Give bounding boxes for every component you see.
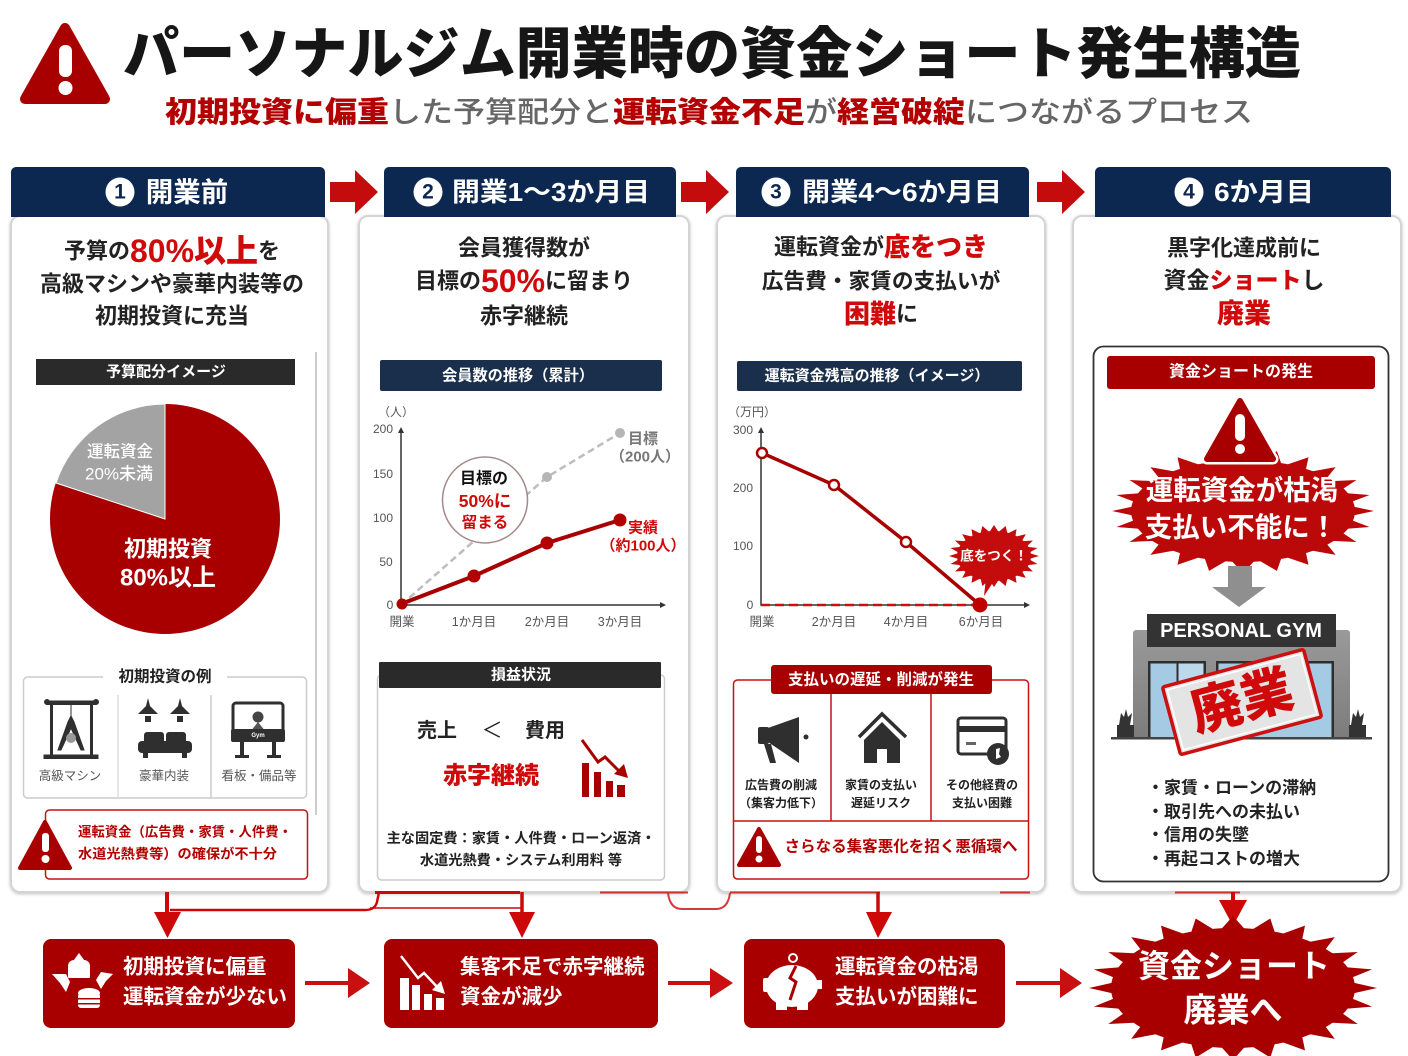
panel 3: months 4 to 6 — [717, 167, 1045, 892]
outcome box 2 — [384, 939, 658, 1028]
payment delay box: 支払い困難 — [952, 795, 1012, 810]
stamp: closed — [1162, 649, 1322, 755]
payment delay box — [733, 665, 1029, 879]
panel 1: before opening — [11, 167, 328, 892]
icon: house — [859, 714, 906, 763]
burst: capital depleted — [1112, 449, 1374, 573]
sub-heading: working capital trend — [737, 361, 1022, 391]
stamp: closed: 廃業 — [1184, 661, 1300, 743]
callout: 50% of target — [442, 457, 528, 543]
profit and loss panel: 損益状況 — [491, 666, 551, 684]
initial investment examples: 高級マシン — [39, 768, 101, 783]
initial investment examples: 初期投資の例 — [118, 666, 212, 686]
panel 2: months 1 to 3 — [359, 167, 689, 892]
payment delay box: （集客力低下） — [739, 795, 823, 810]
line chart: members: 50 — [379, 555, 393, 569]
initial investment examples — [24, 666, 306, 798]
icon: falling bar chart — [582, 740, 628, 797]
fund shortage box: 資金ショートの発生 — [1169, 362, 1313, 380]
pie chart: budget allocation: 運転資金 — [87, 442, 154, 461]
line chart: members: 200 — [373, 422, 393, 436]
profit and loss panel: 売上 — [417, 719, 457, 742]
sub-heading: member count trend: 会員数の推移（累計） — [442, 366, 594, 384]
icon: warning triangle — [1207, 401, 1273, 459]
icon: interior lamps and sofa — [138, 698, 192, 758]
line chart: working capital: 100 — [733, 539, 753, 553]
profit and loss panel: 水道光熱費・システム利用料 等 — [420, 852, 622, 869]
panel 2 summary text: 赤字継続 — [480, 304, 568, 328]
outcome box 3: 運転資金の枯渇 — [835, 956, 978, 978]
initial investment examples: 看板・備品等 — [221, 768, 297, 783]
initial investment examples: 豪華内装 — [139, 768, 189, 783]
panel 1 summary text: 高級マシンや豪華内装等の — [40, 272, 304, 296]
profit and loss panel: ＜ — [482, 720, 502, 742]
arrowheads: connectors — [154, 900, 1247, 938]
icon: title warning triangle — [25, 28, 105, 99]
header: step 4 — [1095, 167, 1391, 217]
panel 4: month 6 — [1073, 167, 1401, 892]
callout: bottoming out burst: 底をつく！ — [960, 548, 1028, 564]
header: step 2: 開業1〜3か月目 — [452, 177, 650, 207]
panel 1 summary text — [40, 233, 304, 328]
panel 1 summary text: 初期投資に充当 — [95, 304, 249, 328]
header: step 4: 6か月目 — [1214, 177, 1314, 207]
payment delay box: さらなる集客悪化を招く悪循環へ — [784, 838, 1018, 856]
line chart: working capital: 4か月目 — [884, 615, 928, 629]
arrow: step 1 to 2 — [330, 170, 378, 214]
payment delay box: その他経費の — [946, 777, 1018, 792]
arrow: step 3 to 4 — [1037, 170, 1085, 214]
header: step 1 — [11, 167, 325, 217]
line chart: members: 150 — [373, 467, 393, 481]
sub-heading: budget allocation — [36, 359, 295, 385]
icon: winged coins — [52, 953, 113, 1008]
consequences list: ・取引先への未払い — [1147, 802, 1300, 822]
icon: broken piggy bank — [763, 954, 822, 1010]
line chart: members: （約100人） — [600, 538, 686, 554]
icon: megaphone — [758, 717, 808, 763]
icon: plants — [1117, 709, 1366, 737]
outcome box 1 — [43, 939, 295, 1028]
line chart: members: 目標 — [628, 430, 658, 448]
callout: 50% of target: 留まる — [462, 514, 508, 532]
callout: 50% of target: 目標の — [460, 468, 508, 488]
header: step 3 — [736, 167, 1029, 217]
fund shortage box — [1094, 346, 1388, 882]
line chart: members: 100 — [373, 511, 393, 525]
panel 3 summary text — [762, 232, 1001, 329]
panel 4 summary text — [1164, 236, 1324, 329]
profit and loss panel: 赤字継続 — [443, 762, 539, 790]
icon: signboard — [231, 703, 285, 758]
illustration: closed personal gym: PERSONAL GYM — [1160, 620, 1322, 642]
profit and loss panel: 費用 — [525, 719, 565, 742]
line chart: members: 1か月目 — [452, 615, 496, 629]
line chart: members — [373, 405, 686, 629]
burst: capital depleted: 運転資金が枯渇 — [1146, 474, 1338, 506]
arrow: grey down — [1212, 566, 1266, 607]
panel 3 summary text: 困難に — [844, 299, 918, 329]
header: step 1: 1 — [114, 180, 126, 204]
illustration: closed personal gym — [1111, 614, 1372, 755]
line chart: working capital: 2か月目 — [812, 615, 856, 629]
panel 1 summary text: 予算の80%以上を — [64, 233, 280, 269]
header: step 3: 開業4〜6か月目 — [802, 177, 1002, 207]
outcome burst: shortage and closure: 廃業へ — [1184, 992, 1282, 1028]
icon: card with coin — [958, 718, 1009, 765]
pie chart: budget allocation: 80%以上 — [120, 564, 216, 592]
payment delay box: 遅延リスク — [851, 795, 911, 810]
arrow: outcome 2 to 3 — [668, 968, 733, 998]
sub-heading: budget allocation: 予算配分イメージ — [106, 362, 226, 380]
line chart: working capital: 0 — [747, 598, 754, 612]
arrow: outcome 1 to 2 — [305, 968, 370, 998]
subtitle: 初期投資に偏重 した予算配分と 運転資金不足 が経営破綻 につながるプロセス — [165, 96, 1253, 129]
outcome box 1: 運転資金が少ない — [123, 984, 287, 1008]
consequences list: ・再起コストの増大 — [1147, 848, 1300, 868]
consequences list: ・信用の失墜 — [1147, 826, 1249, 844]
line chart: members: （人） — [378, 405, 414, 419]
outcome box 1: 初期投資に偏重 — [123, 956, 266, 978]
line chart: members: 実績 — [628, 518, 658, 536]
icon: gym machine — [44, 700, 98, 758]
panel 4 summary text: 黒字化達成前に — [1167, 236, 1321, 260]
line chart: working capital: （万円） — [728, 405, 776, 419]
callout: working capital warning — [20, 810, 308, 879]
panel 2 summary text: 目標の50%に留まり — [415, 263, 633, 299]
panel 2 summary text — [415, 236, 633, 328]
line chart: working capital — [728, 405, 1039, 629]
line chart: members: 開業 — [389, 614, 415, 629]
panel 4 summary text: 資金ショートし — [1164, 267, 1324, 293]
header: step 1: 開業前 — [146, 176, 228, 208]
outcome burst: shortage and closure — [1089, 916, 1377, 1056]
consequences list: ・家賃・ローンの滞納 — [1147, 778, 1316, 798]
outcome box 3 — [744, 939, 1005, 1028]
panel 2 summary text: 会員獲得数が — [458, 236, 590, 260]
icon: falling bars white — [400, 956, 445, 1010]
line chart: working capital: 300 — [733, 423, 753, 437]
pie chart: budget allocation: 20%未満 — [85, 464, 153, 484]
sub-heading: working capital trend: 運転資金残高の推移（イメージ） — [765, 366, 989, 384]
burst: capital depleted: 支払い不能に！ — [1145, 512, 1337, 542]
outcome burst: shortage and closure: 資金ショート — [1138, 948, 1330, 984]
profit and loss panel: 主な固定費：家賃・人件費・ローン返済・ — [387, 830, 655, 847]
line chart: members: 0 — [387, 598, 394, 612]
sub-heading: member count trend — [380, 360, 662, 391]
line chart: members: 3か月目 — [598, 615, 642, 629]
line chart: working capital: 6か月目 — [959, 615, 1003, 629]
header: step 2 — [384, 167, 676, 217]
pie chart: budget allocation — [50, 404, 280, 634]
line chart: members: （200人） — [610, 448, 680, 466]
panel 3 summary text: 広告費・家賃の支払いが — [762, 268, 1001, 294]
arrow: step 2 to 3 — [681, 170, 729, 214]
callout: working capital warning: 水道光熱費等）の確保が不十分 — [78, 846, 278, 862]
payment delay box: 広告費の削減 — [745, 777, 817, 792]
header: step 3: 3 — [770, 180, 782, 204]
profit and loss panel — [378, 662, 664, 880]
consequences list — [1147, 778, 1316, 868]
outcome box 2: 集客不足で赤字継続 — [460, 956, 645, 978]
panel 4 summary text: 廃業 — [1217, 299, 1271, 329]
outcome box 3: 支払いが困難に — [835, 984, 978, 1008]
line chart: members: 2か月目 — [525, 615, 569, 629]
panel 3 summary text: 運転資金が底をつき — [774, 232, 988, 262]
callout: bottoming out burst — [949, 525, 1039, 596]
line chart: working capital: 開業 — [749, 614, 775, 629]
callout: working capital warning: 運転資金（広告費・家賃・人件費・ — [78, 824, 292, 840]
callout: 50% of target: 50%に — [459, 491, 511, 511]
header: step 4: 4 — [1183, 180, 1195, 204]
pie chart: budget allocation: 初期投資 — [124, 536, 212, 562]
payment delay box: 家賃の支払い — [845, 777, 917, 792]
header: step 2: 2 — [422, 180, 434, 204]
icon: signboard: Gym — [251, 733, 265, 739]
outcome box 2: 資金が減少 — [460, 984, 563, 1008]
connectors: panels to outcome boxes — [167, 892, 1240, 915]
payment delay box: 支払いの遅延・削減が発生 — [788, 670, 974, 688]
line chart: working capital: 200 — [733, 481, 753, 495]
arrow: outcome 3 to 4 — [1016, 968, 1082, 998]
title: パーソナルジム開業時の資金ショート発生構造 — [123, 22, 1301, 86]
